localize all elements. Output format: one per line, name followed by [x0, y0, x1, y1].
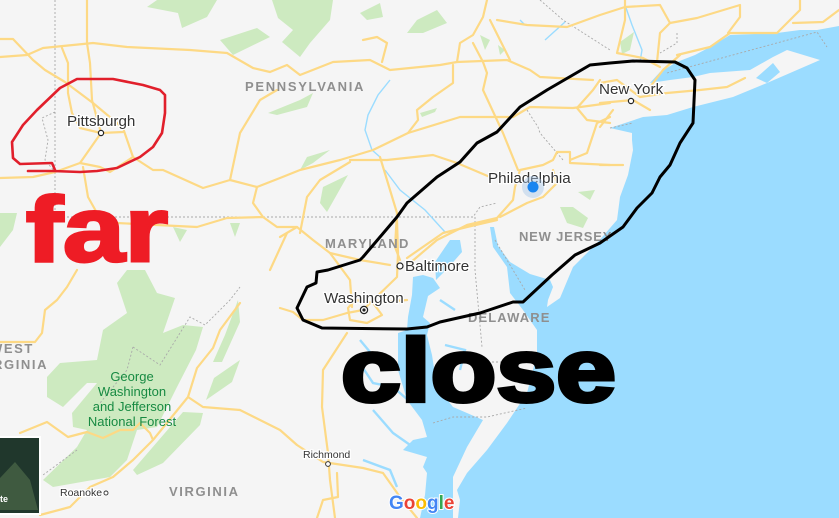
black outline: close region [297, 61, 695, 329]
red outline: far region [12, 79, 165, 172]
forest label: George [110, 369, 154, 384]
state labels [0, 79, 613, 499]
state labels: MARYLAND [325, 236, 410, 251]
tidal rivers [360, 300, 465, 487]
city: Pittsburgh: Pittsburgh [67, 113, 135, 130]
satellite thumbnail [0, 437, 40, 514]
city: Richmond: Richmond [303, 449, 350, 461]
city: Washington: Washington [324, 290, 404, 307]
forest label: National Forest [88, 414, 176, 429]
forest label: and Jefferson [93, 399, 171, 414]
city: Richmond [303, 449, 350, 466]
label: close: close [341, 320, 616, 420]
satellite thumbnail: te [0, 494, 8, 504]
city: New York: New York [599, 81, 664, 98]
rivers [365, 5, 642, 232]
location marker [522, 176, 544, 198]
forests [0, 0, 634, 487]
ocean and bays [398, 26, 839, 518]
city: Philadelphia: Philadelphia [488, 170, 571, 187]
state labels: NEW JERSEY [519, 229, 613, 244]
Google logo: Google [389, 493, 454, 514]
label: far: far [26, 179, 168, 281]
state labels: VIRGINIA [169, 484, 240, 499]
forest label: Washington [98, 384, 166, 399]
state labels: PENNSYLVANIA [245, 79, 365, 94]
state labels: DELAWARE [468, 310, 551, 325]
city: Roanoke: Roanoke [60, 487, 102, 499]
city: Baltimore: Baltimore [405, 258, 469, 275]
